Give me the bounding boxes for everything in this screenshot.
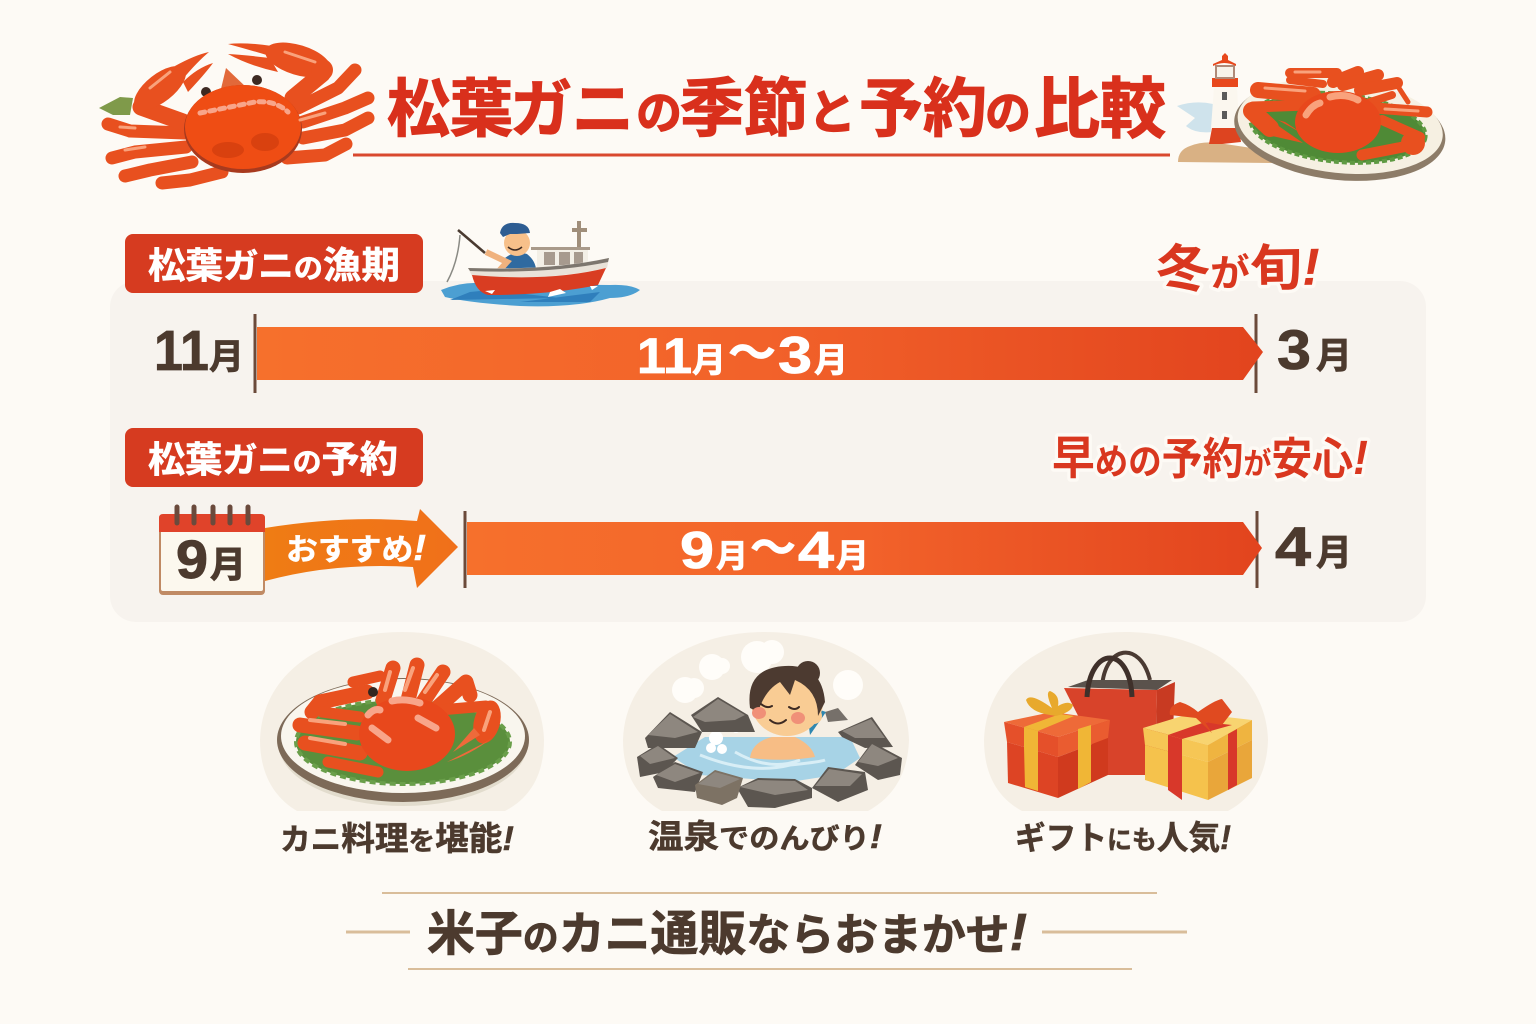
bar: fishing season: 11 [637, 328, 692, 384]
caption: gifts: ギフトにも人気! [1015, 819, 1231, 857]
bar: fishing season: 月 [814, 342, 848, 380]
title: 松葉 [387, 75, 513, 145]
section label: reservation: 松葉ガニの予約 [148, 439, 398, 480]
icon: gifts [984, 632, 1268, 811]
start label: November: 11 [154, 319, 209, 383]
icon: calendar September: 月 [210, 544, 246, 585]
arrow: recommended [265, 509, 458, 588]
bar: reservation: 9 [680, 522, 714, 580]
bar: fishing season: 月 [692, 342, 726, 380]
callout: winter is peak: 冬が旬! [1156, 239, 1321, 299]
icon: fishing boat [441, 221, 640, 306]
section label: fishing season [125, 234, 423, 293]
icon: calendar September: 9 [176, 530, 208, 590]
title: と [808, 87, 856, 140]
bar: fishing season [257, 327, 1263, 385]
tick marks [255, 314, 1256, 393]
icon: crab on plate [1229, 68, 1451, 191]
bar: reservation: ～ [750, 522, 796, 574]
bar: reservation: 4 [798, 522, 834, 580]
end label: March: 月 [1316, 335, 1352, 376]
section label: fishing season: 松葉ガニの漁期 [148, 245, 400, 286]
caption: crab dishes: カニ料理を堪能! [280, 820, 514, 858]
title: 予約 [859, 73, 987, 145]
bar: reservation: 月 [716, 538, 748, 574]
end label: April: 月 [1316, 532, 1352, 573]
start label: November [154, 319, 244, 383]
title: ガニ [510, 76, 634, 145]
icon: crab dish [260, 632, 544, 811]
bar: reservation [467, 522, 1262, 580]
end label: March [1277, 318, 1352, 381]
section label: reservation [125, 428, 423, 487]
title: の [985, 87, 1031, 139]
caption: hot spring: 温泉でのんびり ! [648, 818, 882, 856]
bar: fishing season: ～ [728, 327, 776, 379]
footer rules [382, 893, 1157, 969]
title: の [636, 87, 682, 139]
bar: reservation: 月 [836, 537, 869, 574]
icon: lighthouse [1177, 53, 1272, 163]
tick marks [465, 511, 1257, 588]
panel: timeline background [110, 281, 1426, 622]
end label: March: 3 [1277, 318, 1311, 381]
icon: hot spring [623, 632, 909, 811]
end label: April: 4 [1275, 515, 1311, 578]
title: 比較 [1034, 72, 1166, 146]
icon: large crab [99, 36, 368, 183]
icon: calendar September [159, 507, 265, 595]
title: 季節 [680, 73, 808, 145]
callout: early booking: 早めの予約が安心! [1052, 432, 1368, 485]
footer message: 米子のカニ通販ならおまかせ! [427, 904, 1027, 962]
arrow: recommended: おすすめ! [286, 527, 426, 568]
start label: November: 月 [209, 338, 244, 377]
bar: fishing season: 3 [778, 327, 812, 385]
title underline [353, 154, 1170, 156]
end label: April [1275, 515, 1352, 578]
